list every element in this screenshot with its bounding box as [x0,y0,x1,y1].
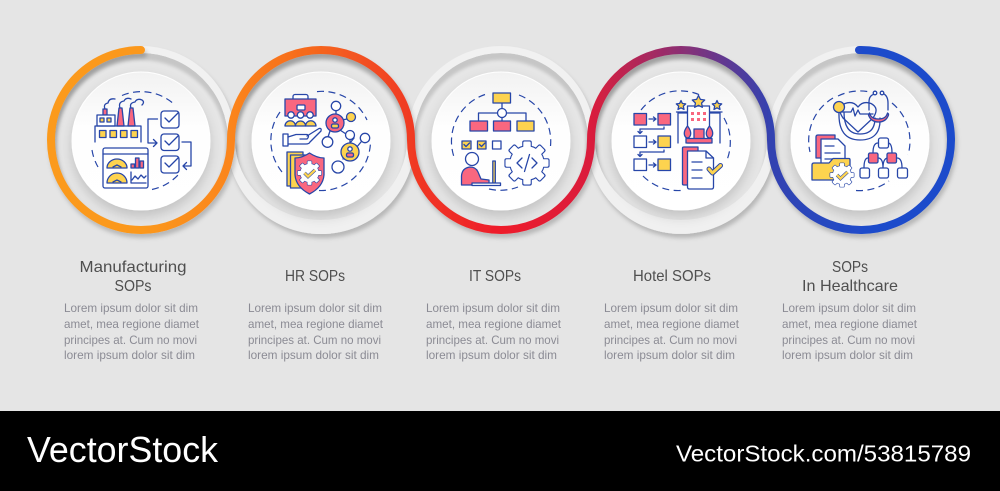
body text [604,302,740,362]
heading line 2: SOPs [114,278,152,295]
icon: org chart, person at laptop and code gear [451,93,551,190]
inner well [55,53,228,169]
inner well [235,54,407,161]
body text: principes at. Cum no movi [248,334,381,347]
panel: Manufacturing SOPs [54,50,231,362]
inner well [774,53,947,170]
body text [426,302,562,362]
body text: lorem ipsum dolor sit dim [782,349,913,362]
body text: Lorem ipsum dolor sit dim [604,302,738,315]
heading: HR SOPs [285,268,345,285]
footer logo: VectorStock [27,429,219,470]
heading: IT SOPs [469,268,521,285]
white disc [612,72,750,210]
heading line 2: In Healthcare [802,278,898,295]
gradient ribbon connecting all circles [51,50,951,230]
heading: Manufacturing [80,259,186,276]
body text: amet, mea regione diamet [64,318,200,331]
panel: HR SOPs [227,53,415,362]
white disc [432,72,570,210]
body text: principes at. Cum no movi [426,334,559,347]
heading: SOPs [832,259,868,276]
body text: amet, mea regione diamet [604,318,740,331]
panel: Hotel SOPs [587,53,775,362]
footer url: VectorStock.com/53815789 [676,440,971,466]
white disc [72,72,210,210]
body text: lorem ipsum dolor sit dim [248,349,379,362]
body text: lorem ipsum dolor sit dim [426,349,557,362]
body text: principes at. Cum no movi [782,334,915,347]
inner well [414,53,588,169]
light ring segment [411,50,591,140]
icon: heart stethoscope, folder and tree [809,91,910,191]
body text [782,302,918,362]
light ring segment [227,140,415,234]
body text: amet, mea regione diamet [782,318,918,331]
panel: IT SOPs [411,50,591,362]
body text: amet, mea regione diamet [426,318,562,331]
body text: lorem ipsum dolor sit dim [64,349,195,362]
icon: factory, dashboard and checklist [92,92,191,190]
body text: Lorem ipsum dolor sit dim [782,302,916,315]
icon: briefcase, people network and shield [271,91,371,194]
body text: amet, mea regione diamet [248,318,384,331]
light ring segment [771,50,861,140]
white disc [252,72,390,210]
body text [64,302,200,362]
white disc [791,72,929,210]
body text: principes at. Cum no movi [64,334,197,347]
light ring segment [587,140,775,234]
body text: lorem ipsum dolor sit dim [604,349,735,362]
icon: process flow, hotel and document [634,91,730,191]
body text: Lorem ipsum dolor sit dim [248,302,382,315]
inner well [595,54,767,161]
body text: Lorem ipsum dolor sit dim [64,302,198,315]
panel: SOPs In Healthcare [771,50,948,362]
body text [248,302,384,362]
light ring segment [141,50,231,140]
body text: Lorem ipsum dolor sit dim [426,302,560,315]
heading: Hotel SOPs [633,268,711,285]
footer bar [0,411,1000,491]
body text: principes at. Cum no movi [604,334,737,347]
